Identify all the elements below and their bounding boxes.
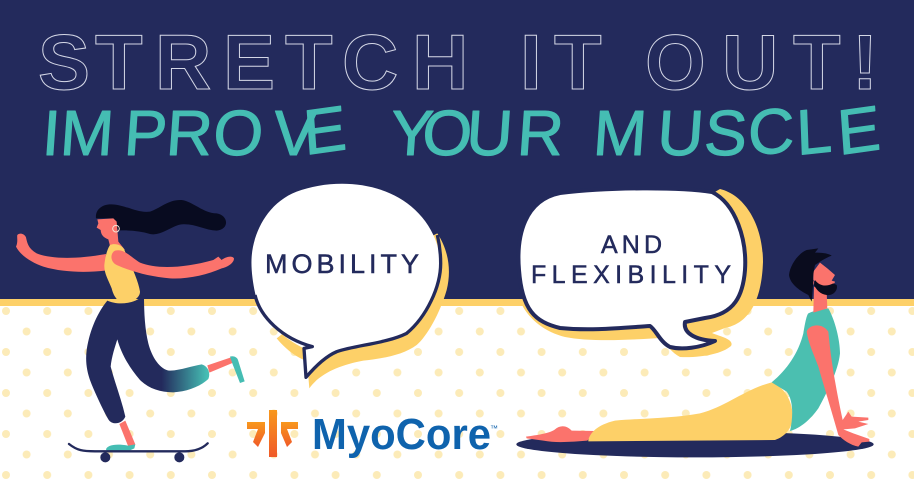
speech bubble: mobility <box>251 184 449 388</box>
bubble shadow <box>277 233 449 388</box>
bubble outline <box>255 235 441 377</box>
front shoe <box>106 444 135 451</box>
arm and hand <box>807 325 869 447</box>
subtitle: improve your muscle: IMPROVEYOURMUSCLE <box>40 92 888 169</box>
title: stretch it out: STRETCHITOUT! <box>38 18 878 106</box>
hair <box>96 200 226 234</box>
earring <box>113 225 119 232</box>
head <box>789 248 837 313</box>
skateboard <box>69 443 208 462</box>
beard <box>814 280 837 295</box>
bubble text: flexibility: FLEXIBILITY <box>531 261 731 289</box>
logo wordmark: MyoCore <box>312 410 491 459</box>
neck <box>813 287 827 313</box>
torso <box>772 308 840 431</box>
foot <box>526 426 595 442</box>
head and neck <box>97 218 125 250</box>
hair <box>789 248 832 302</box>
figure: woman on skateboard <box>16 200 245 462</box>
bubble body <box>251 184 441 377</box>
ear <box>807 279 814 286</box>
trademark: ™ <box>490 424 498 433</box>
legs <box>588 382 793 441</box>
bubble text: MOBILITY <box>265 249 419 279</box>
trousers <box>86 295 209 423</box>
left arm <box>16 234 106 272</box>
background: navy upper section <box>0 0 914 299</box>
bubble body <box>518 188 745 348</box>
yellow divider band <box>0 299 914 306</box>
right arm <box>111 250 234 278</box>
bubble text: and: AND <box>601 231 662 259</box>
mat <box>516 431 874 457</box>
bubble shadow <box>522 189 763 357</box>
face <box>813 263 835 286</box>
logo icon <box>247 410 298 457</box>
background: polka dot floor <box>0 306 914 491</box>
speech bubble: and flexibility <box>518 188 763 357</box>
back shoe <box>230 356 245 383</box>
lower leg front <box>119 421 135 447</box>
top <box>104 244 140 303</box>
figure: man in cobra pose <box>516 248 874 457</box>
lower leg back <box>207 357 233 373</box>
logo: MyoCore <box>247 410 498 459</box>
